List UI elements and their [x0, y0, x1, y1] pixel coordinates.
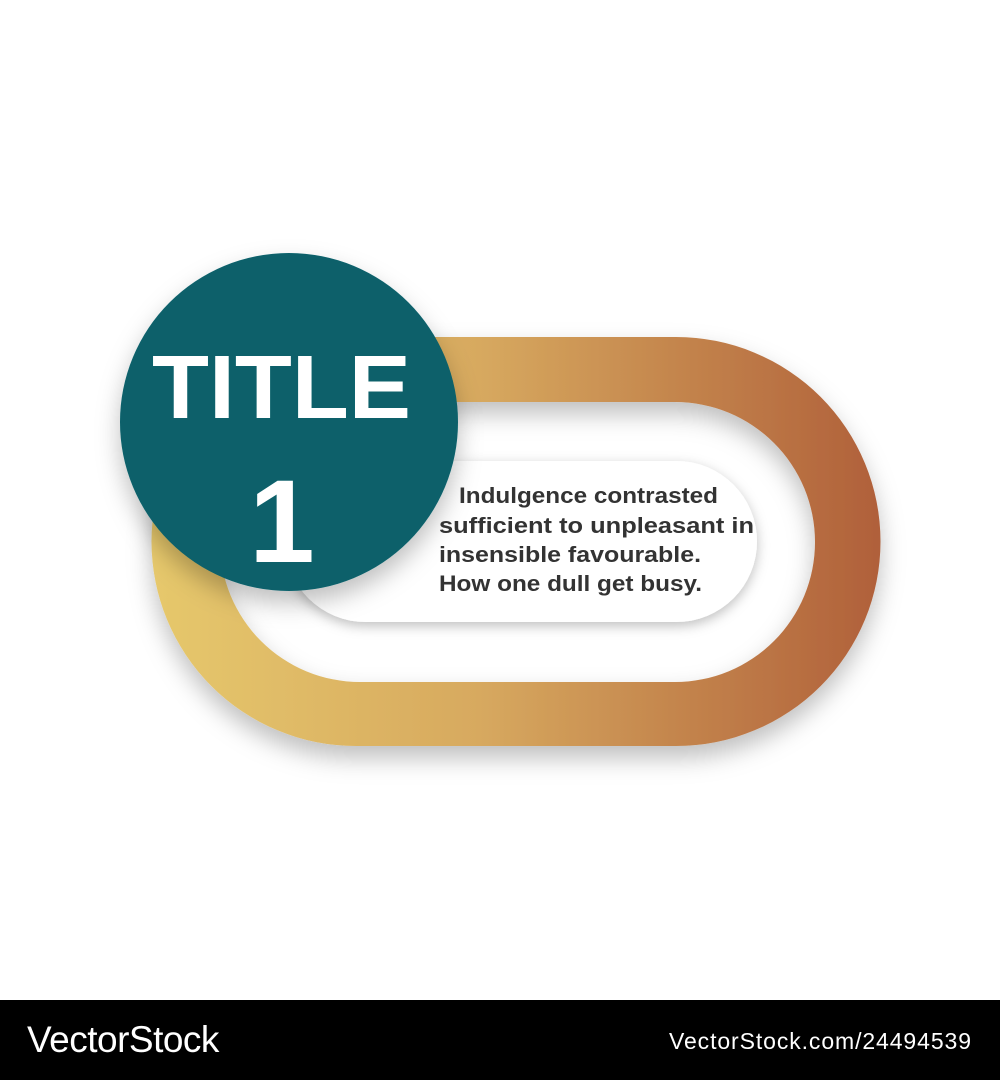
circle: title badge: [120, 253, 458, 591]
body text: Indulgence contrasted: [459, 483, 718, 508]
body text: sufficient to unpleasant in: [439, 513, 754, 538]
title text: TITLE: [152, 338, 411, 438]
ring: gold pill: [152, 337, 881, 746]
body text: insensible favourable.: [439, 542, 701, 567]
body text: How one dull get busy.: [439, 571, 702, 596]
body text: [439, 483, 754, 596]
footer url: VectorStock.com/24494539: [669, 1028, 972, 1054]
number: 1: [249, 456, 315, 588]
footer logo: VectorStock: [27, 1019, 219, 1060]
inner text pill: [285, 461, 757, 622]
footer bar: [0, 1000, 1000, 1080]
